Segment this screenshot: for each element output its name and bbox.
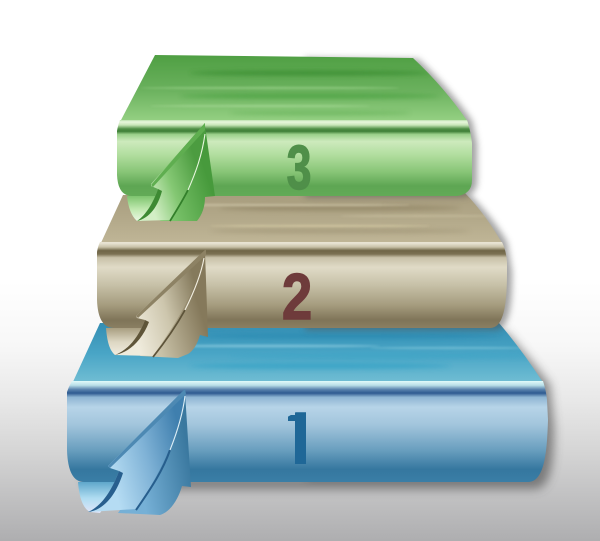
book 1 spine front [67, 381, 548, 482]
tab crease [170, 190, 188, 221]
arrow tab: beige [106, 249, 208, 358]
book 1 top face [72, 323, 544, 384]
book 3 spine front [117, 120, 472, 196]
arrow tab: green [127, 123, 215, 221]
tab body [160, 126, 215, 221]
book 2 top face [100, 193, 503, 245]
book 3 top face [120, 55, 468, 122]
book 2 top streaks [204, 204, 476, 234]
book 1: blue [67, 323, 554, 489]
book 2 shadow [305, 195, 512, 330]
tab curl [78, 482, 122, 513]
number 2: 2 [282, 261, 312, 333]
tab crease [153, 310, 185, 357]
tab curl [106, 328, 146, 355]
tab edge [151, 123, 205, 187]
tab curl [127, 196, 165, 221]
tab edge [108, 389, 186, 468]
book 2 spine front [97, 242, 507, 328]
tab dark curl edge [115, 320, 149, 355]
number 3: 3 [287, 134, 311, 203]
tab dark curl edge [137, 189, 162, 221]
tab wing [137, 123, 205, 221]
tab edge [136, 249, 206, 318]
book 3: green [117, 55, 477, 203]
tab crease [136, 450, 170, 510]
number 1: 1 [275, 397, 323, 480]
tab wing [88, 389, 185, 512]
book 2: beige [97, 193, 512, 333]
book 1 shadow [82, 330, 554, 489]
book 3 top streaks [140, 70, 440, 115]
tab body [118, 392, 191, 515]
book 3 shadow [305, 58, 477, 197]
tab wing [115, 249, 206, 356]
tab body [140, 252, 208, 358]
tab dark curl edge [88, 471, 123, 512]
arrow tab: blue [78, 389, 191, 515]
book 1 top streaks [194, 334, 520, 370]
